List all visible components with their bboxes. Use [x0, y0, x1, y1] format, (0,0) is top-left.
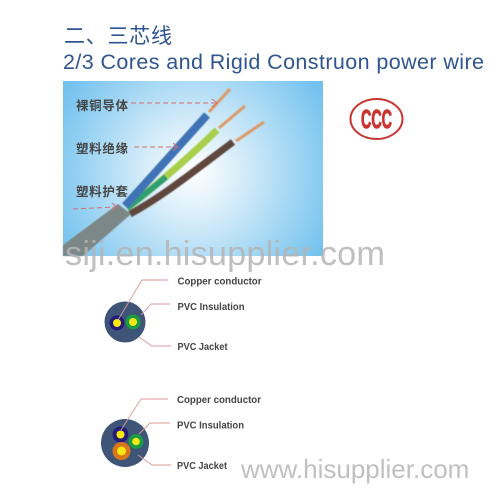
copper strand: brown core [236, 122, 264, 141]
logo: CCC mark: CCC [361, 104, 392, 134]
label: PVC jacket: PVC Jacket [177, 460, 227, 472]
arrow: plastic insulation [134, 143, 178, 151]
core: orange [112, 442, 130, 460]
wire: blue core [125, 115, 207, 206]
watermark: lower: www.hisupplier.com [240, 454, 469, 484]
jacket circle [104, 302, 146, 342]
leader lines [121, 399, 171, 465]
arrow: plastic jacket [73, 203, 117, 211]
diagram: two-core cross-section [104, 276, 262, 353]
label: copper conductor: Copper conductor [178, 276, 262, 288]
wire: brown core [130, 142, 233, 214]
arrow: bare copper conductor [131, 99, 217, 107]
label: plastic jacket: 塑料护套 [76, 184, 128, 199]
core: green [128, 434, 144, 449]
wire: green-yellow core [127, 130, 217, 208]
core: navy [110, 316, 124, 330]
label: bare copper conductor: 裸铜导体 [76, 98, 128, 113]
cable illustration [63, 89, 264, 256]
jacket circle [101, 419, 149, 467]
leader lines [118, 280, 171, 346]
label: PVC insulation: PVC Insulation [178, 301, 244, 313]
wire: green section [127, 177, 166, 208]
label: PVC jacket: PVC Jacket [178, 341, 228, 353]
diagram: three-core cross-section [101, 394, 261, 472]
label: copper conductor: Copper conductor [177, 394, 261, 406]
watermark: upper: siji.en.hisupplier.com [65, 235, 385, 273]
title: Chinese heading: 二、三芯线 [64, 25, 172, 48]
cable jacket [63, 204, 131, 256]
core: green [126, 314, 140, 330]
core: navy [112, 426, 128, 442]
title: English heading: 2/3 Cores and Rigid Construon power wire [63, 50, 484, 74]
copper strand: blue core [209, 89, 230, 112]
panel: cable photo [63, 81, 323, 256]
copper strand: green core [219, 106, 245, 128]
logo: CCC mark [350, 99, 402, 139]
label: PVC insulation: PVC Insulation [177, 420, 244, 432]
label: plastic insulation: 塑料绝缘 [76, 141, 128, 156]
